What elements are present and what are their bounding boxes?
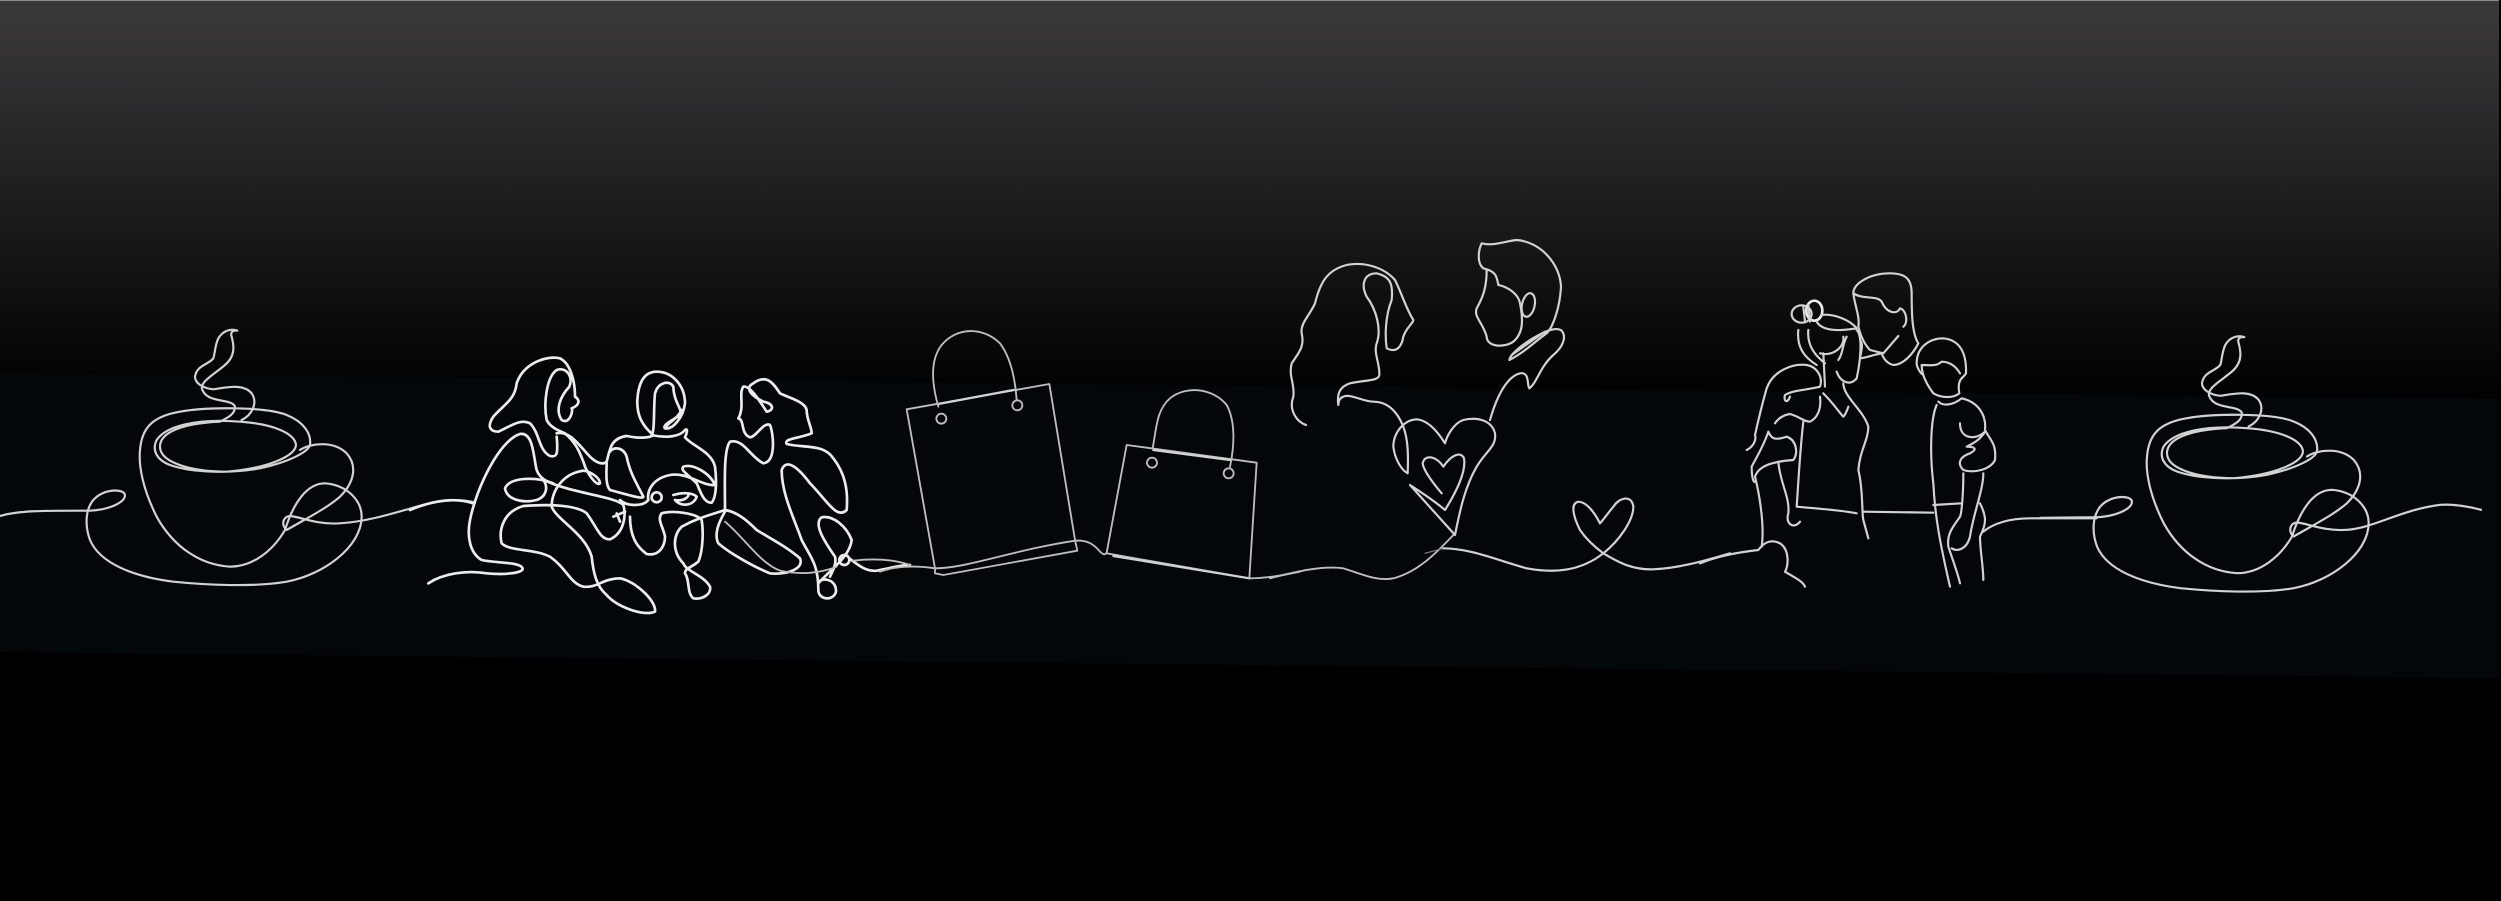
figure: mother and child: [1700, 301, 1933, 587]
figure: left woman: [410, 358, 655, 613]
icon: coffee cup right: [2040, 336, 2481, 592]
illustration: three friends sitting: [410, 358, 910, 613]
figure: right woman: [725, 379, 852, 598]
icon: left shopping bag: [880, 331, 1077, 575]
icon: right shopping bag: [1075, 390, 1300, 578]
panel: slanted horizontal band: [0, 373, 2499, 678]
figure: middle woman: [557, 372, 716, 505]
illustration: family of four: [1700, 273, 2097, 587]
icon: coffee cup left: [0, 330, 475, 585]
figure: woman with heart: [1291, 264, 1495, 535]
illustration: two shopping bags: [880, 331, 1300, 578]
figure: father: [1837, 273, 1918, 383]
figure: man: [1476, 240, 1564, 420]
figure: boy: [1917, 338, 2097, 587]
line: wave with heart loop: [1270, 499, 1730, 579]
illustration: couple with hearts: [1270, 240, 1730, 579]
